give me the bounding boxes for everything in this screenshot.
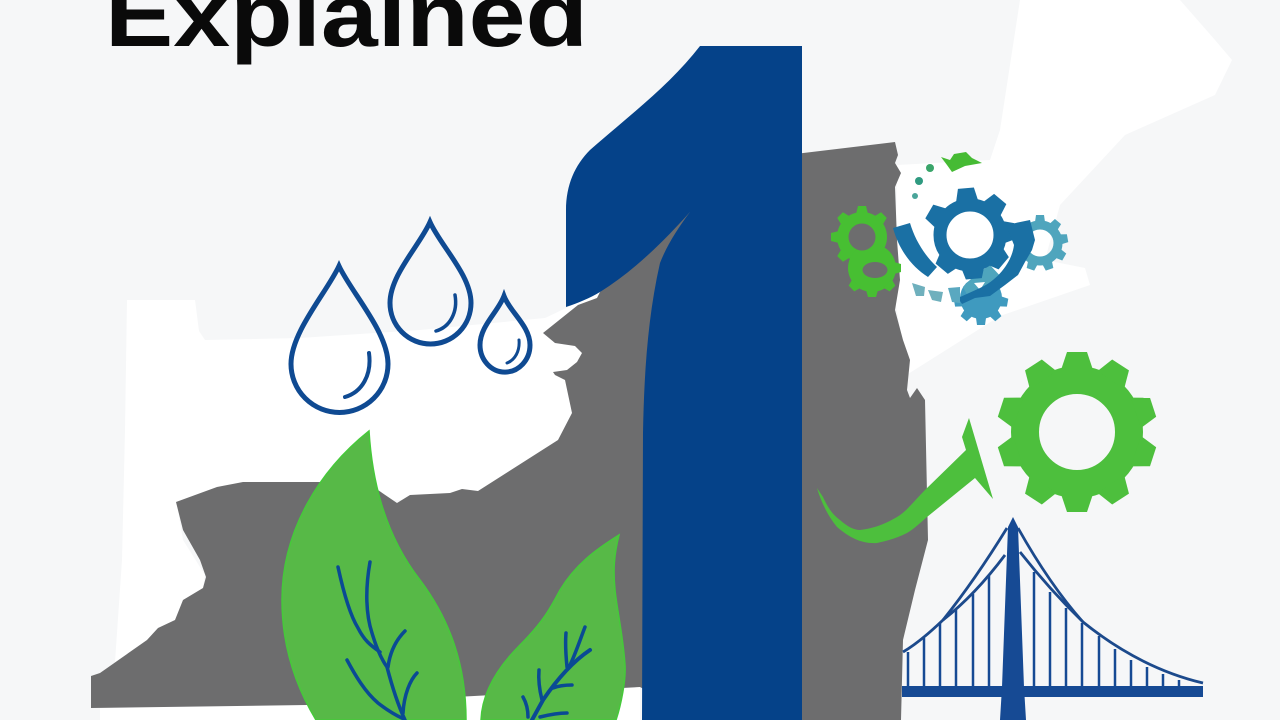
map: grey landmass right [795,142,928,720]
map: grey landmass left [91,212,700,720]
icon: medium water drop [390,222,471,344]
icon: large green gear [996,352,1158,512]
gear: teal bottom [954,265,1008,325]
big numeral 1 [566,46,802,720]
map: white left region [100,292,640,720]
leaf veins [338,562,417,720]
icon: suspension bridge [902,517,1203,720]
arc: dark blue left [893,223,937,277]
bridge tower [1000,517,1026,720]
bridge hangers [908,572,1179,686]
teal arc dashes [912,283,960,303]
gear: blue centre [924,187,1016,280]
gear: teal right [1022,215,1068,271]
leaf veins [523,627,590,720]
icon: small water drop [480,296,530,372]
icon: large leaf [282,431,466,720]
icon: gear cluster [831,152,1068,325]
arrow: green swoosh [817,418,993,543]
arc: dark blue right [958,220,1035,304]
icon: large water drop [291,266,388,412]
dotted arc top [912,152,982,199]
icon: water drops [291,222,530,412]
gear: small green pair [831,206,901,297]
icon: small leaf [481,535,625,720]
bridge cables [903,528,1203,683]
bridge deck [902,686,1203,697]
map: white upper right region [895,0,1232,374]
